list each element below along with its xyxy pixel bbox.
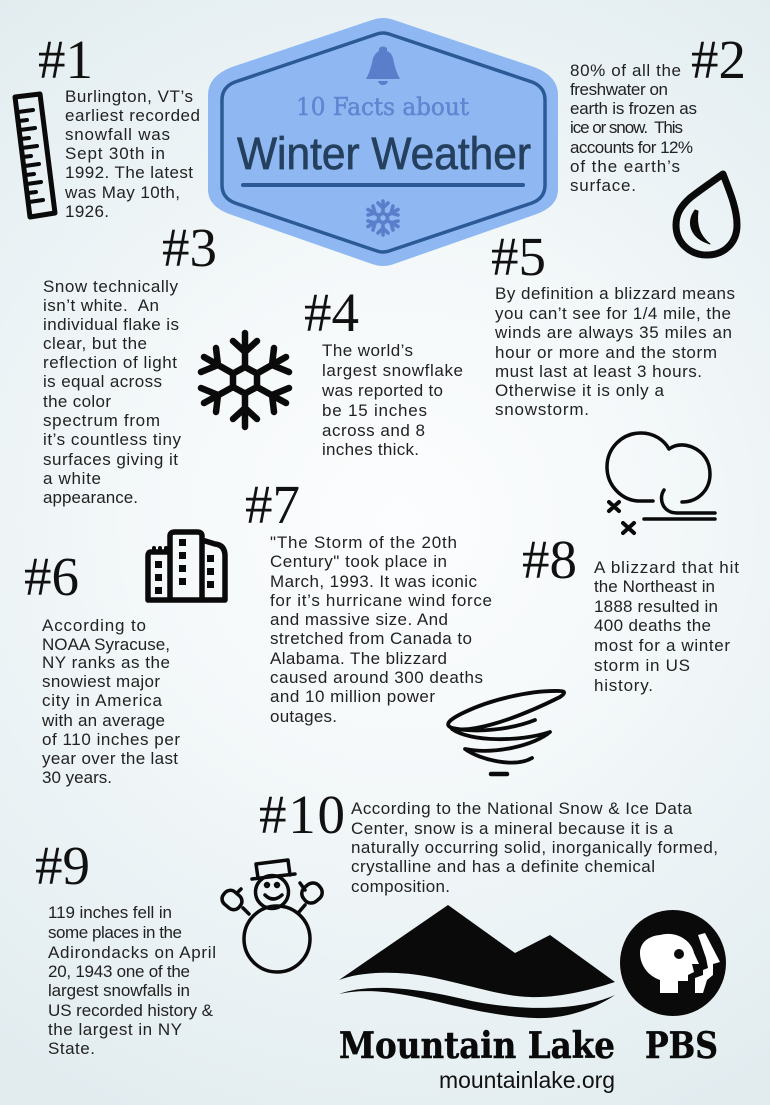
text 2 — [570, 61, 697, 195]
title badge — [208, 18, 558, 266]
text 7 — [270, 533, 492, 726]
heading 8: #8 — [522, 529, 577, 590]
text 4: across and 8 — [322, 421, 425, 440]
text 6: According to — [42, 616, 146, 635]
text 1 — [64, 87, 200, 221]
text 6 — [41, 616, 180, 787]
heading 9: #9 — [35, 835, 90, 896]
text 3: reflection of light — [43, 353, 177, 372]
website: mountainlake.org — [439, 1067, 615, 1093]
text 5 — [494, 284, 735, 419]
text 10: crystalline and has a definite chemical — [351, 857, 655, 876]
text 5: you can’t see for 1/4 mile, the — [495, 304, 731, 323]
heading 3: #3 — [162, 217, 217, 278]
text 9: Adirondacks on April — [48, 943, 216, 962]
fact 3 — [43, 217, 217, 507]
text 6: year over the last — [42, 749, 178, 768]
fact 2 — [570, 29, 746, 255]
fact 5 — [491, 226, 735, 419]
text 10: According to the National Snow & Ice Data — [351, 799, 693, 818]
heading 5: #5 — [491, 226, 546, 287]
text 4: be 15 inches — [322, 401, 427, 420]
text 8: history. — [594, 676, 653, 695]
text 9: largest snowfalls in — [48, 981, 190, 1000]
text 5: By definition a blizzard means — [495, 284, 735, 303]
icon: ruler — [15, 94, 55, 217]
icon: snowman — [219, 860, 325, 972]
text 3: appearance. — [43, 488, 138, 507]
text 4 — [321, 341, 463, 459]
text 3: it’s countless tiny — [43, 430, 182, 449]
text 7: caused around 300 deaths — [270, 668, 483, 687]
text 7: "The Storm of the 20th — [270, 533, 457, 552]
text 7: outages. — [270, 707, 337, 726]
text 1: was May 10th, — [64, 183, 180, 202]
text 9: US recorded history & — [48, 1001, 214, 1020]
heading 10: #10 — [259, 784, 345, 845]
text 8 — [594, 558, 739, 695]
heading 7: #7 — [245, 474, 300, 535]
text 7: Century" took place in — [270, 552, 447, 571]
text 5: hour or more and the storm — [495, 343, 717, 362]
icon: water drop — [676, 174, 737, 255]
text 10: composition. — [351, 877, 450, 896]
wordmark Mountain Lake: Mountain Lake — [339, 1025, 615, 1067]
text 7: and massive size. And — [270, 610, 448, 629]
text 9: 20, 1943 one of the — [48, 962, 190, 981]
icon: blizzard cloud — [607, 433, 715, 533]
text 6: with an average — [41, 711, 165, 730]
text 7: March, 1993. It was iconic — [270, 572, 478, 591]
fact 7 — [245, 474, 492, 726]
text 6: city in America — [42, 691, 163, 710]
text 4: was reported to — [321, 381, 443, 400]
text 1: Burlington, VT’s — [65, 87, 193, 106]
fact 9 — [35, 835, 216, 1058]
text 3: individual flake is — [43, 315, 179, 334]
text 1: Sept 30th in — [65, 144, 165, 163]
text 6: NY ranks as the — [42, 653, 170, 672]
wordmark PBS: PBS — [645, 1025, 718, 1067]
fact 8 — [522, 529, 739, 695]
text 7: and 10 million power — [270, 687, 435, 706]
text 6: 30 years. — [42, 768, 112, 787]
text 9: the largest in NY — [48, 1020, 182, 1039]
text 4: largest snowflake — [322, 361, 463, 380]
text 1: earliest recorded — [65, 106, 200, 125]
text 5: winds are always 35 miles an — [494, 323, 732, 342]
text 8: 1888 resulted in — [594, 597, 718, 616]
text 8: most for a winter — [594, 636, 730, 655]
text 9: some places in the — [48, 923, 182, 942]
fact 6 — [24, 532, 225, 787]
text 6: of 110 inches per — [42, 730, 180, 749]
text 1: 1926. — [65, 202, 109, 221]
text 2: surface. — [570, 176, 636, 195]
text 3: spectrum from — [43, 411, 160, 430]
fact 4 — [304, 282, 463, 459]
text 10 — [351, 799, 718, 896]
text 2: accounts for 12% — [570, 138, 693, 157]
text 9: State. — [48, 1039, 95, 1058]
main title: Winter Weather — [237, 128, 531, 179]
text 4: The world’s — [322, 341, 413, 360]
text 3: Snow technically — [43, 277, 178, 296]
fact 1 — [15, 29, 200, 221]
text 2: earth is frozen as — [570, 99, 697, 118]
text 8: the Northeast in — [594, 577, 715, 596]
icon: bell — [366, 46, 400, 85]
text 8: storm in US — [594, 656, 690, 675]
icon: large snowflake — [201, 333, 289, 427]
logo mountains — [339, 905, 615, 997]
text 2: 80% of all the — [570, 61, 681, 80]
subtitle: 10 Facts about — [296, 93, 469, 121]
text 5: Otherwise it is only a — [495, 381, 665, 400]
logo: Mountain Lake PBS — [339, 905, 726, 1093]
title underline — [243, 183, 523, 187]
text 2: of the earth’s — [570, 157, 680, 176]
text 6: NOAA Syracuse, — [42, 635, 170, 654]
logo PBS circle — [620, 910, 726, 1016]
fact 10 — [259, 784, 718, 896]
text 7: Alabama. The blizzard — [270, 649, 447, 668]
text 10: naturally occurring solid, inorganically formed, — [351, 838, 718, 857]
text 3: the color — [43, 392, 111, 411]
text 7: stretched from Canada to — [270, 629, 472, 648]
icon: small snowflake — [368, 201, 398, 235]
text 9 — [48, 903, 216, 1058]
text 10: Center, snow is a mineral because it is a — [351, 819, 674, 838]
text 3: surfaces giving it — [43, 450, 178, 469]
heading 4: #4 — [304, 282, 359, 343]
text 9: 119 inches fell in — [48, 903, 172, 922]
text 1: 1992. The latest — [65, 163, 193, 182]
text 2: ice or snow. This — [570, 118, 683, 137]
text 3: isn’t white. An — [43, 296, 159, 315]
text 1: snowfall was — [65, 125, 170, 144]
icon: tornado — [448, 691, 564, 774]
text 3: a white — [43, 469, 101, 488]
text 5: must last at least 3 hours. — [495, 362, 702, 381]
logo water wave — [339, 988, 615, 1018]
text 4: inches thick. — [322, 440, 419, 459]
text 3 — [43, 277, 182, 507]
text 3: clear, but the — [43, 334, 147, 353]
heading 1: #1 — [38, 29, 93, 90]
heading 2: #2 — [691, 29, 746, 90]
text 6: snowiest major — [42, 672, 160, 691]
text 8: 400 deaths the — [594, 616, 711, 635]
text 3: is equal across — [43, 372, 162, 391]
heading 6: #6 — [24, 546, 79, 607]
text 7: for it’s hurricane wind force — [270, 591, 492, 610]
text 8: A blizzard that hit — [594, 558, 739, 577]
icon: city buildings — [148, 532, 225, 600]
text 2: freshwater on — [570, 80, 668, 99]
text 5: snowstorm. — [495, 400, 589, 419]
